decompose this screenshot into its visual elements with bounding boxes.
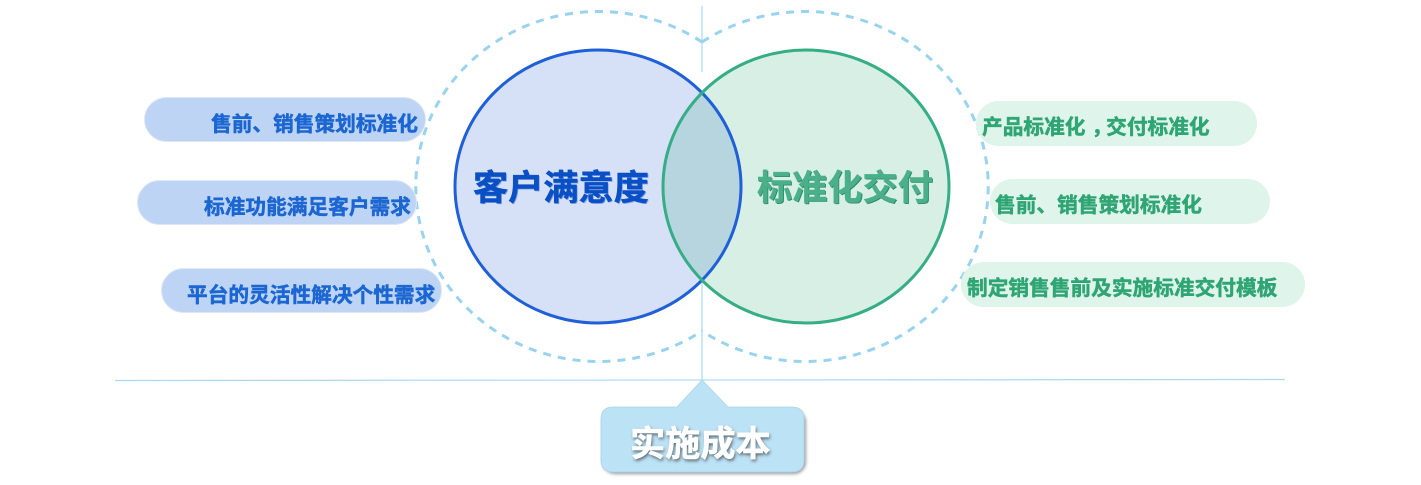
circle: customer satisfaction [455, 50, 741, 323]
overlap region [664, 95, 740, 278]
pill: standard functions (blue): 标准功能满足客户需求 [204, 196, 411, 219]
pill: product standardization (green): 产品标准化 ，交付标准化 [982, 116, 1210, 139]
pill: delivery templates (green): 制定销售售前及实施标准交付模板 [967, 277, 1277, 300]
pill: platform flexibility (blue): 平台的灵活性解决个性需求 [187, 284, 435, 307]
pill: product standardization (green) [976, 101, 1257, 146]
pill: pre-sales standardization (blue) [144, 97, 426, 142]
dashed outer arc left [416, 11, 702, 362]
circle outline: blue [455, 50, 741, 323]
pill: pre-sales standardization (blue): 售前、销售策划标准化 [211, 113, 418, 136]
pill: standard functions (blue) [137, 180, 417, 225]
venn diagram [115, 6, 1285, 476]
pill: delivery templates (green) [961, 262, 1305, 307]
pill: platform flexibility (blue) [161, 268, 442, 313]
pill: pre-sales standardization (green) [990, 179, 1270, 224]
heading: standardized delivery: 标准化交付 [757, 169, 933, 208]
heading: customer satisfaction: 客户满意度 [473, 169, 649, 208]
circle: standardized delivery [663, 50, 949, 323]
callout pointer and box [601, 380, 806, 474]
pill: pre-sales standardization (green): 售前、销售策划标准化 [995, 194, 1202, 217]
circle outline: green [663, 50, 949, 323]
axis lines [115, 6, 1285, 380]
dashed outer arc right [702, 11, 988, 361]
heading: implementation cost: 实施成本 [630, 425, 771, 464]
